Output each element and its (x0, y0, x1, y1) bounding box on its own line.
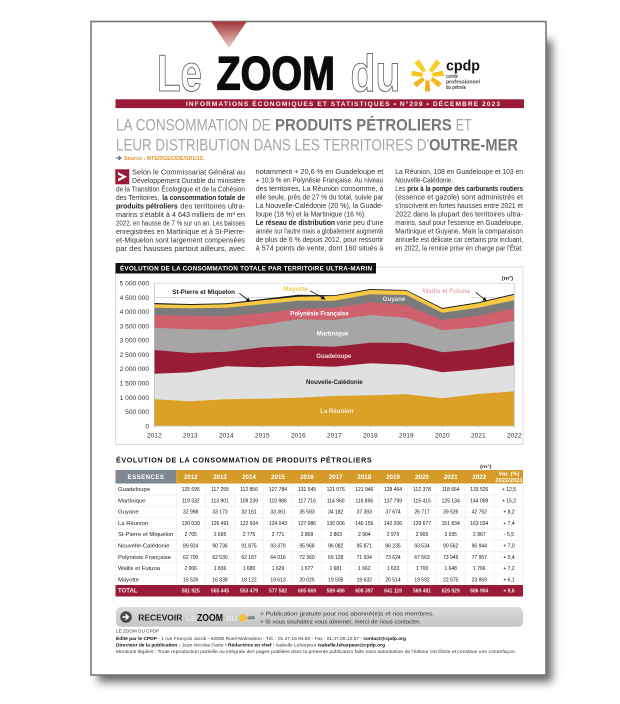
row: total: 577 582 (269, 589, 287, 595)
row: Mayotte (118, 577, 515, 583)
x axis labels: 2017 (327, 432, 342, 439)
row: Wallis et Futuna: 1 662 (358, 566, 371, 572)
row: Martinique: 116 896 (355, 498, 373, 504)
row: Martinique: 109 239 (240, 498, 258, 504)
panel: area chart (116, 263, 523, 444)
table header: 2016 (300, 474, 314, 481)
row: Polynésie Française: 73 949 (443, 555, 459, 561)
row: Mayotte: 18 122 (241, 577, 257, 583)
y axis labels: 3 500 000 (120, 323, 149, 330)
row: St-Pierre et Miquelon: 2 904 (358, 532, 371, 538)
row: Guyane: 33 173 (212, 510, 228, 516)
series labels: Wallis et Futuna (423, 289, 471, 295)
x axis labels: 2013 (183, 432, 198, 439)
row: Guyane: 37 674 (385, 510, 401, 516)
icon: red chevron box (115, 169, 129, 184)
imprint footer: Édité par le CPDP - 1 rue François Jacob - 92500 Rueil-Malmaison - Tél. : 01.47.16.94.60 - Fax : 01.47.08.10.57 - contact@cpdp.org (116, 634, 406, 641)
page sheet (91, 22, 546, 675)
y axis labels: 3 000 000 (120, 338, 149, 345)
issue banner: INFORMATIONS ÉCONOMIQUES ET STATISTIQUES • N°209 • DÉCEMBRE 2023 (186, 99, 500, 108)
table header (116, 470, 523, 484)
row: Mayotte: 19 592 (414, 577, 430, 583)
row: Martinique: 119 332 (182, 498, 200, 504)
x axis labels: 2015 (255, 432, 270, 439)
row: Wallis et Futuna: Wallis et Futuna (118, 566, 161, 572)
row: total: 589 486 (327, 589, 345, 595)
main title: LA CONSOMMATION DE (116, 116, 271, 135)
row: Guyane: 37 393 (357, 510, 372, 516)
series labels: Mayotte (283, 287, 308, 293)
row: St-Pierre et Miquelon: - 5,5 (504, 532, 514, 538)
subscribe band: Le (186, 613, 196, 623)
text column 1: marins s'établit à 4 643 milliers de m³ en (116, 211, 245, 219)
subscribe band: ZOOM (197, 613, 223, 624)
row: La Réunion: 129 677 (413, 521, 431, 527)
row: La Réunion: 126 491 (211, 521, 229, 527)
text column 2: loupe (18 %) et la Martinique (16 %). (256, 210, 366, 218)
row: St-Pierre et Miquelon: 2 705 (184, 532, 197, 538)
row: total (116, 585, 523, 596)
row: Nouvelle-Calédonie: Nouvelle-Calédonie (118, 544, 170, 550)
table header: Var. (%) (499, 472, 520, 478)
row: St-Pierre et Miquelon: 2 775 (243, 532, 255, 538)
table header: 2022/2021 (495, 478, 523, 484)
row: La Réunion: 130 039 (182, 521, 200, 527)
text column 3: Les (395, 185, 406, 193)
row: St-Pierre et Miquelon: 2 905 (416, 532, 428, 538)
row: Nouvelle-Calédonie: 93 534 (414, 544, 430, 550)
text column 1: la consommation totale de (162, 194, 245, 202)
row: total: 686 904 (470, 589, 489, 595)
text column 2: + 10,9 % en Polynésie Française. Au niveau (256, 176, 383, 184)
row: Nouvelle-Calédonie: + 7,0 (503, 544, 515, 550)
masthead: Le ZOOM du: ZOOM (216, 46, 335, 99)
text column 2: notamment + 20,6 % en Guadeloupe et (256, 168, 383, 176)
row: total: 626 929 (442, 589, 460, 595)
row: Guadeloupe: 121 076 (327, 487, 345, 493)
y axis labels: 4 000 000 (120, 309, 149, 316)
arrows to thin series (239, 291, 487, 302)
row: Polynésie Française: Polynésie Française (118, 555, 172, 561)
row: Mayotte: 23 959 (472, 577, 487, 583)
row: Guyane: Guyane (118, 510, 139, 516)
chart heading: ÉVOLUTION DE LA CONSOMMATION TOTALE PAR TERRITOIRE ULTRA-MARIN (120, 264, 372, 273)
main title: OUTRE-MER (429, 136, 518, 155)
x axis labels: 2021 (471, 432, 486, 439)
text column 1: par des hausses partout ailleurs, avec (116, 245, 245, 253)
row: Guyane: 26 717 (414, 510, 430, 516)
row: Guadeloupe: 112 378 (413, 487, 431, 493)
row: La Réunion: 124 043 (269, 521, 287, 527)
imprint footer: Directeur de la publication : Jean-Nicolas Fiatte • Rédactrice en chef : Isabelle Leharpeur isabelle.leharpeur@cpdp.org (116, 643, 385, 648)
row: Nouvelle-Calédonie: 96 082 (328, 544, 344, 550)
text column 1: et-Miquelon sont largement compensées (116, 236, 245, 244)
row: Polynésie Française: 62 167 (241, 555, 257, 561)
row: Martinique: 144 099 (470, 498, 489, 504)
row: Guadeloupe: 128 464 (384, 487, 402, 493)
row: Wallis et Futuna: + 7,2 (503, 566, 515, 572)
text column 1: Développement Durable du ministère (132, 177, 245, 185)
text column 1: 2022, en hausse de 7 % sur un an. Les baisses (116, 220, 245, 228)
row: St-Pierre et Miquelon: 3 035 (444, 532, 457, 538)
row: Wallis et Futuna: 1 633 (387, 566, 399, 572)
text column 1: de la Transition Écologique et de la Cohésion (116, 184, 245, 194)
y axis labels: 2 000 000 (120, 366, 149, 373)
row: Mayotte: 19 508 (328, 577, 344, 583)
icon: arrow circle (120, 611, 132, 623)
row: Nouvelle-Calédonie: 95 871 (357, 544, 372, 550)
text column 3: prix à la pompe des carburants routiers (407, 185, 523, 193)
table header: 2013 (213, 474, 227, 481)
row: La Réunion: 130 006 (327, 521, 345, 527)
y axis labels: 1 000 000 (120, 395, 149, 402)
unit label: (m³) (502, 275, 513, 282)
row: Wallis et Futuna: 1 629 (272, 566, 284, 572)
data table (116, 470, 523, 596)
row: Wallis et Futuna: 1 700 (416, 566, 428, 572)
row: Wallis et Futuna: 1 680 (243, 566, 255, 572)
table heading: ÉVOLUTION DE LA CONSOMMATION DE PRODUITS PÉTROLIERS (116, 456, 372, 465)
row: total: 581 925 (182, 589, 200, 595)
row: Nouvelle-Calédonie: 93 379 (270, 544, 286, 550)
row: Polynésie Française: 62 530 (212, 555, 228, 561)
row: Nouvelle-Calédonie: 91 875 (241, 544, 257, 550)
series labels: St-Pierre et Miquelon (172, 290, 235, 296)
series labels: Guadeloupe (316, 354, 352, 360)
row: Guyane: 32 998 (183, 510, 199, 516)
series labels: Polynésie Française (290, 311, 349, 317)
text column 2 (256, 168, 384, 252)
series labels: La Réunion (320, 409, 354, 415)
row: Mayotte: 20 514 (385, 577, 401, 583)
row: Guadeloupe: 117 255 (211, 487, 229, 493)
row: Polynésie Française: 71 934 (357, 555, 372, 561)
row: Martinique: 117 716 (298, 498, 316, 504)
table header: 2022 (472, 474, 487, 481)
row: Polynésie Française: + 5,4 (503, 555, 515, 561)
icon: cpdp sun (411, 59, 444, 92)
row: Guadeloupe: 112 856 (240, 487, 258, 493)
row: Martinique: Martinique (118, 498, 146, 504)
imprint footer (116, 628, 516, 654)
row: total: 553 479 (240, 589, 258, 595)
main title (116, 116, 518, 155)
table header: 2021 (444, 474, 458, 481)
row: Guyane: 32 161 (241, 510, 257, 516)
text column 3: Martinique et Guyane. Mais la comparaison (395, 227, 523, 235)
row: St-Pierre et Miquelon: 2 863 (329, 532, 342, 538)
row: total: + 9,6 (503, 589, 515, 595)
row: Guadeloupe: 118 664 (442, 487, 460, 493)
row: Martinique: + 15,2 (502, 498, 516, 504)
logo: cpdp: cpdp (446, 58, 480, 74)
y axis labels: 500 000 (125, 409, 149, 416)
text column 1: Selon le Commissariat Général au (132, 169, 245, 177)
row: Nouvelle-Calédonie: 95 968 (299, 544, 315, 550)
row: Martinique: 137 799 (384, 498, 402, 504)
text column 3: La Réunion, 108 en Guadeloupe et 103 en (395, 168, 523, 176)
x axis labels: 2020 (435, 432, 450, 439)
text column 2: à 574 points de vente, dont 160 situés à (256, 244, 383, 252)
text column 2: Le réseau de distribution (256, 219, 335, 227)
text column 1: des territoires ultra- (180, 202, 246, 210)
row: La Réunion: 151 834 (442, 521, 460, 527)
row: Guadeloupe: 133 526 (470, 487, 489, 493)
row: Martinique: 113 901 (211, 498, 229, 504)
text column 2: année sur l'autre mais a globalement augmenté (256, 227, 383, 235)
row: Guadeloupe: 125 695 (182, 487, 200, 493)
text column 1: enregistrées en Martinique et à St-Pierre- (116, 228, 246, 236)
issue banner (116, 99, 524, 108)
row: Martinique: 114 960 (327, 498, 345, 504)
masthead: Le ZOOM du (157, 45, 400, 103)
table header: 2017 (329, 474, 343, 481)
row: St-Pierre et Miquelon: 2 695 (214, 532, 226, 538)
stacked areas (154, 289, 514, 426)
row: La Réunion: 163 034 (470, 521, 489, 527)
series labels: Nouvelle-Calédonie (306, 380, 363, 386)
row: Polynésie Française: 64 016 (270, 555, 286, 561)
row: Nouvelle-Calédonie: 96 944 (472, 544, 487, 550)
row: Guyane: 39 526 (443, 510, 459, 516)
row: total: 608 397 (355, 589, 374, 595)
row: Nouvelle-Calédonie: 89 924 (183, 544, 199, 550)
row: La Réunion: 122 604 (240, 521, 258, 527)
imprint footer: LE ZOOM DU CPDP (116, 628, 159, 633)
row: Nouvelle-Calédonie: 90 562 (443, 544, 459, 550)
logo: cpdp: professionnel (446, 79, 481, 85)
subscribe band: RECEVOIR (138, 614, 183, 622)
row: total: 605 669 (298, 589, 316, 595)
y axis labels: 5 000 000 (120, 281, 149, 288)
x axis labels: 2018 (363, 432, 378, 439)
chart heading (116, 263, 376, 274)
row: Nouvelle-Calédonie: 90 736 (212, 544, 228, 550)
x axis labels: 2014 (219, 432, 234, 439)
row: Wallis et Futuna: 1 681 (329, 566, 342, 572)
imprint footer: Mentions légales : Toute reproduction partielle ou intégrale des pages publiées dans la présente publication faite sans autorisation de l'éditeur est illicite et constitue une contrefaçon. (116, 649, 516, 654)
row: Nouvelle-Calédonie (118, 544, 515, 550)
y axis labels: 2 500 000 (120, 352, 149, 359)
row: Wallis et Futuna: 1 766 (473, 566, 486, 572)
row: Martinique: 125 134 (442, 498, 460, 504)
logo: cpdp: du pétrole (446, 85, 466, 91)
text column 1: des Territoires, (116, 194, 159, 202)
y axis labels: 0 (145, 423, 149, 430)
row: Mayotte: + 6,1 (503, 577, 515, 583)
text column 1 (116, 169, 246, 253)
text column 1: produits pétroliers (116, 202, 178, 210)
x axis labels (147, 432, 522, 439)
row: St-Pierre et Miquelon: 2 970 (387, 532, 399, 538)
x axis labels: 2019 (399, 432, 414, 439)
row: Polynésie Française: 72 360 (299, 555, 315, 561)
table header: 2019 (386, 474, 400, 481)
text column 3: en 2022, la remise prise en charge par l'État. (395, 243, 523, 252)
row: Mayotte: 19 632 (357, 577, 372, 583)
subscribe band: du (226, 613, 237, 623)
masthead: Le ZOOM du: du (350, 45, 400, 103)
row: La Réunion: 127 986 (298, 521, 316, 527)
row: Polynésie Française: 69 128 (328, 555, 344, 561)
row: La Réunion: 142 206 (384, 521, 402, 527)
row: La Réunion: 140 159 (355, 521, 374, 527)
subscribe band: cpdp (248, 615, 255, 620)
row: Guyane: 33 361 (270, 510, 286, 516)
logo: cpdp: comité (446, 74, 458, 80)
row: Martinique: 110 986 (269, 498, 287, 504)
row: Mayotte: 22 575 (443, 577, 459, 583)
text column 3: 2022 dans la plupart des territoires ultra- (395, 210, 524, 218)
masthead: Le ZOOM du: Le (157, 45, 202, 103)
row: total: TOTAL (118, 589, 138, 595)
x axis labels: 2016 (291, 432, 306, 439)
text column 3 (395, 168, 524, 252)
row: St-Pierre et Miquelon: 2 867 (473, 532, 486, 538)
row: Guyane: 42 752 (472, 510, 487, 516)
table header: 2020 (415, 474, 429, 481)
row: Guyane: 34 182 (328, 510, 344, 516)
text column 3: (essence et gazole) sont administrés et (395, 193, 523, 201)
y axis labels (120, 281, 149, 430)
row: Martinique (118, 498, 516, 504)
row: Nouvelle-Calédonie: 96 235 (385, 544, 401, 550)
page shadow (98, 40, 552, 682)
series labels: Martinique (317, 331, 349, 337)
row: Polynésie Française: 73 624 (385, 555, 401, 561)
row: St-Pierre et Miquelon: 2 771 (272, 532, 284, 538)
text column 2: elle seule, près de 27 % du total, suivie par (256, 193, 384, 201)
row: total: 641 119 (384, 589, 402, 595)
row: Polynésie Française (118, 555, 515, 561)
text column 2: des territoires, La Réunion consomme, à (256, 185, 383, 193)
row: Guadeloupe (118, 487, 516, 493)
table header: ESSENCES (128, 474, 164, 481)
table header: 2014 (242, 474, 256, 481)
row: St-Pierre et Miquelon: 2 809 (301, 532, 313, 538)
row: Guyane (118, 510, 515, 516)
main title: PRODUITS PÉTROLIERS (275, 116, 452, 135)
text column 2: varie peu d'une (336, 219, 383, 227)
table header: 2015 (271, 474, 285, 481)
row: Guadeloupe: + 12,5 (502, 487, 516, 493)
row: La Réunion: La Réunion (118, 521, 148, 527)
y axis labels: 1 500 000 (120, 380, 149, 388)
text column 3: s'inscrivent en fortes hausses entre 2021 et (395, 202, 523, 210)
row: St-Pierre et Miquelon (118, 532, 514, 538)
row: Wallis et Futuna (118, 566, 515, 572)
subscribe band: > Publication gratuite pour nos abonné(e)s et nos membres. (260, 611, 434, 617)
text column 3: annuelle est délicate car certains prix incluant, (395, 236, 523, 244)
row: Polynésie Française: 62 700 (183, 555, 199, 561)
row: Martinique: 115 415 (413, 498, 431, 504)
row: Mayotte: Mayotte (118, 577, 140, 583)
row: Guyane: + 8,2 (503, 510, 515, 516)
table header: 2012 (184, 474, 198, 481)
source line: Source : MTE/DGEC/DE/SD1/1C. (124, 156, 206, 162)
x axis labels: 2022 (507, 432, 522, 439)
row: total: 569 481 (413, 589, 431, 595)
table unit: (m³) (480, 464, 492, 469)
text column 2: La Nouvelle-Calédonie (20 %), la Guade- (256, 202, 384, 210)
main title: ET (456, 116, 472, 135)
x axis labels: 2012 (147, 432, 162, 439)
row: Mayotte: 19 613 (270, 577, 286, 583)
table header: 2018 (357, 474, 372, 481)
row: Guadeloupe: 131 545 (298, 487, 316, 493)
subscribe band: > Si vous souhaitez vous abonner, merci de nous contacter. (260, 620, 421, 626)
text column 3: marins, sauf pour l'essence en Guadeloupe, (395, 219, 523, 227)
row: Guadeloupe: Guadeloupe (118, 487, 151, 493)
row: Polynésie Française: 67 563 (414, 555, 430, 561)
series labels (172, 287, 471, 415)
row: Wallis et Futuna: 1 836 (214, 566, 226, 572)
row: Guyane: 35 583 (299, 510, 315, 516)
subscribe band (116, 607, 523, 627)
row: Wallis et Futuna: 1 677 (301, 566, 313, 572)
row: La Réunion (118, 521, 515, 527)
row: total: 565 445 (211, 589, 229, 595)
row: St-Pierre et Miquelon: St-Pierre et Miquelon (118, 532, 173, 538)
row: Polynésie Française: 77 957 (472, 555, 487, 561)
row: Wallis et Futuna: 2 006 (184, 566, 197, 572)
row: Mayotte: 20 025 (299, 577, 315, 583)
row: Mayotte: 16 526 (183, 577, 199, 583)
row: Guadeloupe: 121 946 (355, 487, 374, 493)
logo: cpdp (411, 58, 481, 92)
row: Wallis et Futuna: 1 648 (444, 566, 457, 572)
y axis labels: 4 500 000 (120, 295, 149, 302)
text column 2: de plus de 6 % depuis 2012, pour ressortir (256, 236, 384, 244)
row: Mayotte: 16 838 (212, 577, 228, 583)
decorative triangle marker (211, 22, 247, 48)
main title: LEUR DISTRIBUTION DANS LES TERRITOIRES D' (116, 136, 429, 155)
row: Guadeloupe: 127 784 (269, 487, 287, 493)
row: La Réunion: + 7,4 (503, 521, 515, 527)
series labels: Guyane (383, 297, 406, 303)
text column 3: Nouvelle-Calédonie. (395, 176, 453, 184)
